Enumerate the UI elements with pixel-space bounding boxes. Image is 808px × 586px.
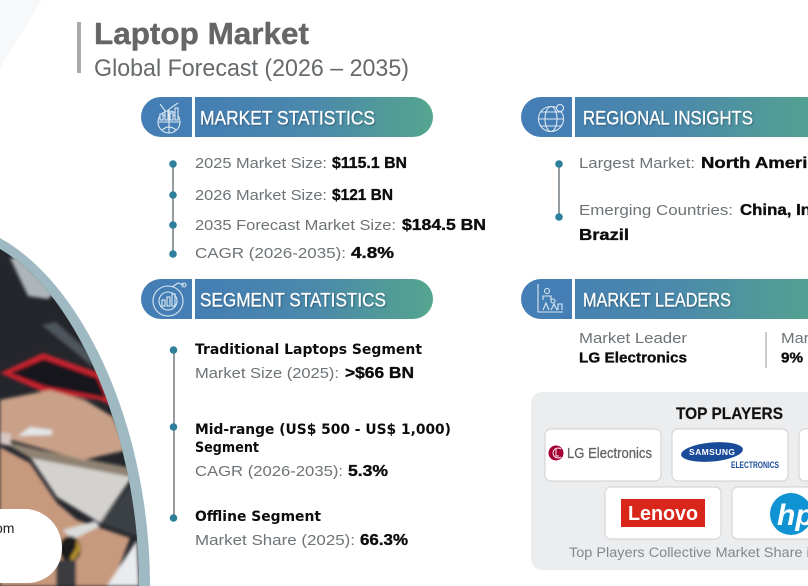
stat: 2026 market size: 2026 Market Size:	[195, 187, 327, 204]
emerging countries: Emerging Countries:	[579, 202, 733, 219]
logo card: Samsung: SAMSUNG	[689, 447, 735, 457]
header pill: market leaders	[521, 279, 808, 319]
logo card: LG Electronics	[545, 429, 661, 481]
subtitle: Global Forecast (2026 – 2035)	[94, 55, 409, 82]
segment: mid-range: Mid-range (US$ 500 - US$ 1,000)	[195, 422, 451, 438]
stat: 2026 market size: $121 BN	[332, 187, 393, 204]
market share: 9%	[781, 350, 803, 366]
stat: CAGR	[195, 245, 394, 262]
largest market: Largest Market:	[579, 155, 695, 172]
header pill: segment statistics	[141, 279, 433, 319]
icon: globe with pin	[538, 104, 564, 132]
logo card: Samsung: ELECTRONICS	[731, 460, 779, 470]
heading: top players: TOP PLAYERS	[676, 404, 783, 423]
title: Laptop Market	[94, 16, 309, 51]
icon: donut chart	[153, 283, 186, 316]
header pill: market leaders: MARKET LEADERS	[583, 290, 731, 312]
icon: people and chart	[538, 284, 563, 312]
panel: top players	[531, 392, 808, 570]
title block	[77, 16, 309, 73]
segment: traditional laptops	[195, 342, 422, 382]
logo card: Samsung	[672, 429, 788, 481]
panel: regional insights	[521, 97, 808, 244]
segment: mid-range: 5.3%	[348, 463, 388, 480]
timeline: market statistics	[169, 160, 177, 258]
emerging countries: Brazil	[579, 227, 629, 244]
segment: offline: Market Share (2025):	[195, 532, 355, 549]
segment: offline	[195, 509, 408, 549]
segment: traditional laptops: Traditional Laptops Segment	[195, 342, 422, 358]
segment: traditional laptops: Market Size (2025):	[195, 365, 339, 382]
header pill: regional insights: REGIONAL INSIGHTS	[583, 108, 753, 130]
logo card: HP	[732, 487, 808, 539]
largest market	[579, 155, 808, 172]
header pill: market statistics: MARKET STATISTICS	[200, 108, 375, 130]
segment: traditional laptops: >$66 BN	[345, 365, 414, 382]
stat: 2035 forecast: $184.5 BN	[402, 217, 486, 234]
panel: segment statistics	[141, 279, 451, 549]
largest market: North America	[701, 155, 808, 172]
stat: 2025 market size: 2025 Market Size:	[195, 155, 327, 172]
logo card: partly visible third card	[799, 429, 808, 481]
market leader	[579, 330, 687, 366]
segment: mid-range	[195, 422, 451, 480]
emerging countries	[579, 202, 808, 244]
stat: 2026 market size	[195, 187, 393, 204]
header pill: segment statistics: SEGMENT STATISTICS	[200, 290, 386, 312]
panel: market statistics	[141, 97, 486, 262]
logo card: Lenovo: Lenovo	[628, 503, 698, 525]
logo card: LG Electronics: LG Electronics	[567, 446, 652, 462]
segment: mid-range: Segment	[195, 440, 259, 456]
callout bubble	[0, 509, 62, 583]
timeline: regional	[555, 160, 563, 221]
segment: mid-range: CAGR (2026-2035):	[195, 463, 343, 480]
stat: 2035 forecast: 2035 Forecast Market Size:	[195, 217, 396, 234]
logo card: Lenovo	[605, 487, 721, 539]
icon: globe with bar chart	[158, 103, 180, 133]
decorative background shape	[0, 0, 42, 68]
stat: 2035 forecast	[195, 217, 486, 234]
stat: CAGR: 4.8%	[351, 245, 394, 262]
header pill: market statistics	[141, 97, 433, 137]
stat: 2025 market size: $115.1 BN	[332, 155, 407, 172]
timeline: segments	[170, 346, 177, 522]
segment: offline: 66.3%	[360, 532, 408, 549]
market share	[781, 330, 808, 366]
header pill: regional insights	[521, 97, 808, 137]
stat: 2025 market size	[195, 155, 407, 172]
photo: hands typing on a laptop	[0, 238, 150, 586]
market leader: LG Electronics	[579, 350, 687, 366]
market leader: Market Leader	[579, 330, 687, 347]
segment: offline: Offline Segment	[195, 509, 321, 525]
stat: CAGR: CAGR (2026-2035):	[195, 245, 346, 262]
panel: market leaders	[521, 279, 808, 368]
